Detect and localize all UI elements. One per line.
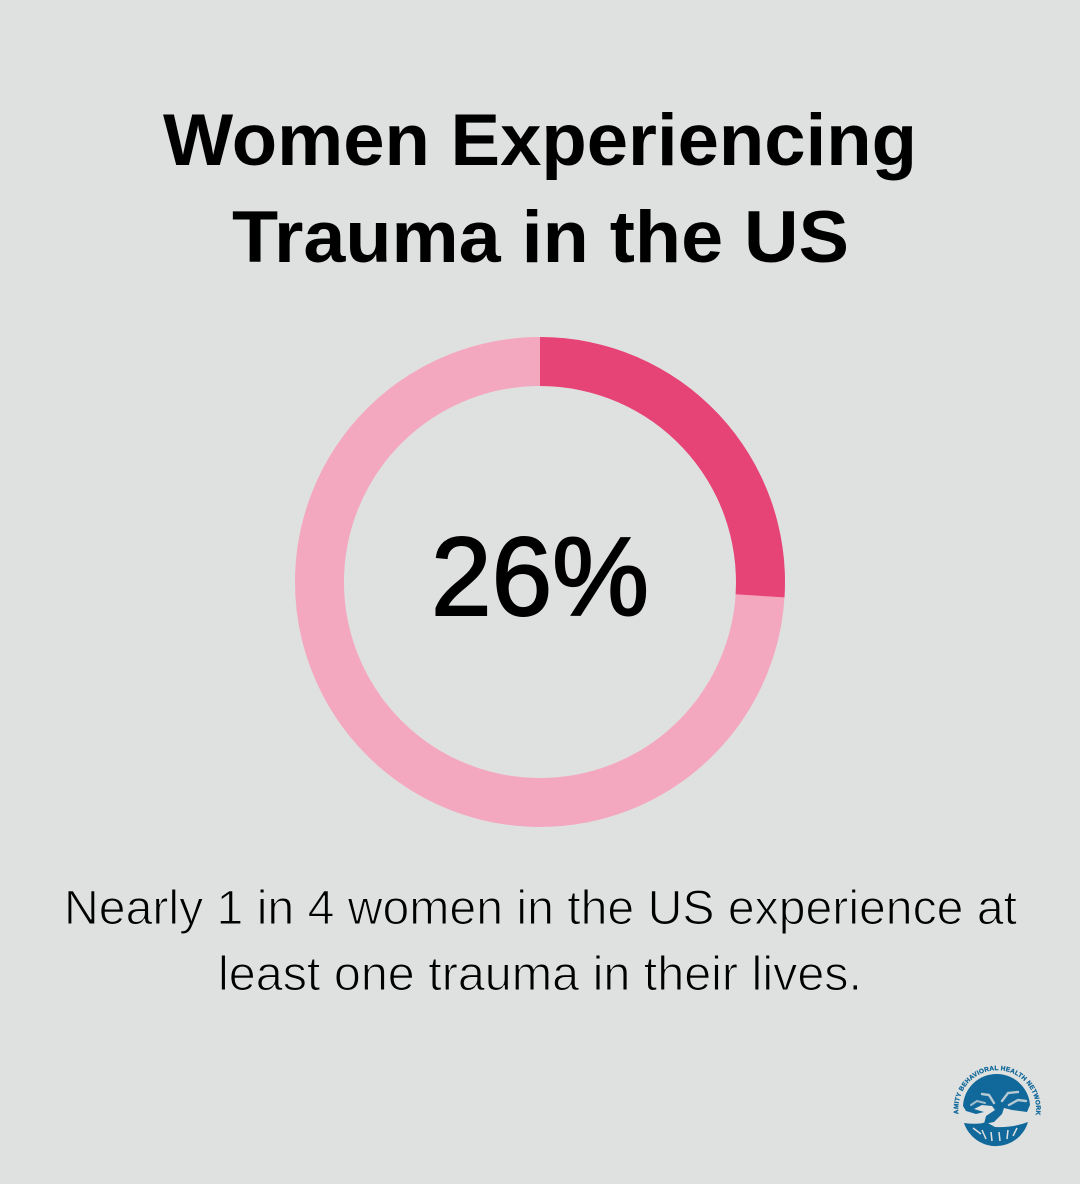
donut track <box>320 362 760 802</box>
icon: tree canopy <box>963 1074 1030 1124</box>
description: Nearly 1 in 4 women in the US experience at <box>64 882 1017 935</box>
donut segment: 26% <box>540 337 785 597</box>
title: Women Experiencing <box>163 100 917 181</box>
description: least one trauma in their lives. <box>218 948 862 1001</box>
logo text: AMITY BEHAVIORAL HEALTH NETWORK <box>954 1066 1041 1116</box>
description <box>64 882 1017 1001</box>
icon: root gaps <box>973 1128 1017 1141</box>
title <box>163 100 917 278</box>
donut chart <box>320 337 785 802</box>
icon: sky gaps between branches <box>971 1092 1026 1105</box>
logo: Amity Behavioral Health Network <box>954 1066 1041 1146</box>
center value: 26% <box>431 515 649 639</box>
title: Trauma in the US <box>232 197 849 278</box>
icon: roots bowl <box>964 1122 1028 1146</box>
